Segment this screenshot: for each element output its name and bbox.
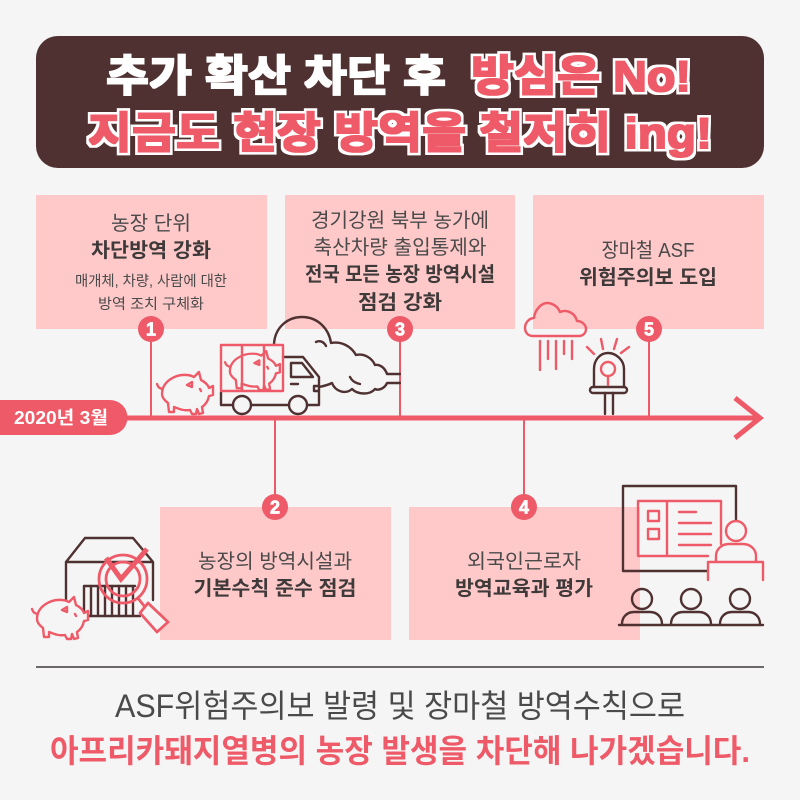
date pill xyxy=(0,400,128,435)
panel 4: foreign worker education xyxy=(409,507,640,640)
marker 1: 1 xyxy=(146,320,156,340)
marker 5: 5 xyxy=(644,320,654,340)
conclusion text: ASF위험주의보 발령 및 장마철 방역수칙으로 xyxy=(115,688,685,724)
panel 3: vehicle control: 축산차량 출입통제와 xyxy=(314,236,486,259)
marker 2: 2 xyxy=(270,498,280,518)
icon: rain cloud xyxy=(525,303,586,370)
icon: siren xyxy=(587,339,629,414)
panel 4: foreign worker education: 외국인근로자 xyxy=(467,550,581,573)
icon: pig by the line xyxy=(157,372,213,414)
title line 1 xyxy=(106,53,691,101)
panel 1: blocking quarantine: 차단방역 강화 xyxy=(91,239,211,262)
marker 1 xyxy=(138,316,164,418)
icon: classroom xyxy=(619,486,763,625)
panel 1: blocking quarantine: 농장 단위 xyxy=(111,212,191,235)
marker 5 xyxy=(636,316,662,418)
title line 1: 추가 확산 차단 후 xyxy=(106,53,446,101)
date pill: 2020년 3월 xyxy=(14,408,108,428)
panel 1: blocking quarantine: 방역 조치 구체화 xyxy=(98,296,204,313)
panel 2: facility check: 기본수칙 준수 점검 xyxy=(194,577,356,600)
conclusion text: 아프리카돼지열병의 농장 발생을 차단해 나가겠습니다. xyxy=(50,733,750,769)
panel 3: vehicle control xyxy=(285,195,515,329)
panel 5: monsoon alert xyxy=(533,195,764,329)
marker 3 xyxy=(387,316,413,418)
panel 2: facility check xyxy=(160,507,391,640)
panel 5: monsoon alert: 장마철 ASF xyxy=(602,239,694,262)
icon: truck xyxy=(221,345,319,414)
marker 2 xyxy=(262,418,288,520)
icon: pig beside warehouse xyxy=(32,597,88,639)
title line 2: 지금도 현장 방역을 철저히 ing! xyxy=(88,110,712,158)
panel 5: monsoon alert: 위험주의보 도입 xyxy=(579,266,717,289)
icon: smoke cloud xyxy=(274,317,400,394)
title banner xyxy=(36,36,764,168)
panel 3: vehicle control: 경기강원 북부 농가에 xyxy=(311,209,489,232)
panel 1: blocking quarantine xyxy=(36,195,267,329)
panel 4: foreign worker education: 방역교육과 평가 xyxy=(455,577,593,600)
marker 4: 4 xyxy=(519,498,529,518)
panel 1: blocking quarantine: 매개체, 차량, 사람에 대한 xyxy=(75,273,227,290)
panel 3: vehicle control: 전국 모든 농장 방역시설 xyxy=(305,263,495,286)
marker 4 xyxy=(511,418,537,520)
panel 2: facility check: 농장의 방역시설과 xyxy=(198,550,352,573)
marker 3: 3 xyxy=(395,320,405,340)
conclusion text xyxy=(50,688,750,769)
timeline axis with arrow xyxy=(120,398,760,438)
icon: warehouse with magnifier xyxy=(66,538,168,632)
title line 1: 방심은 No! xyxy=(471,53,691,101)
panel 3: vehicle control: 점검 강화 xyxy=(358,291,442,314)
